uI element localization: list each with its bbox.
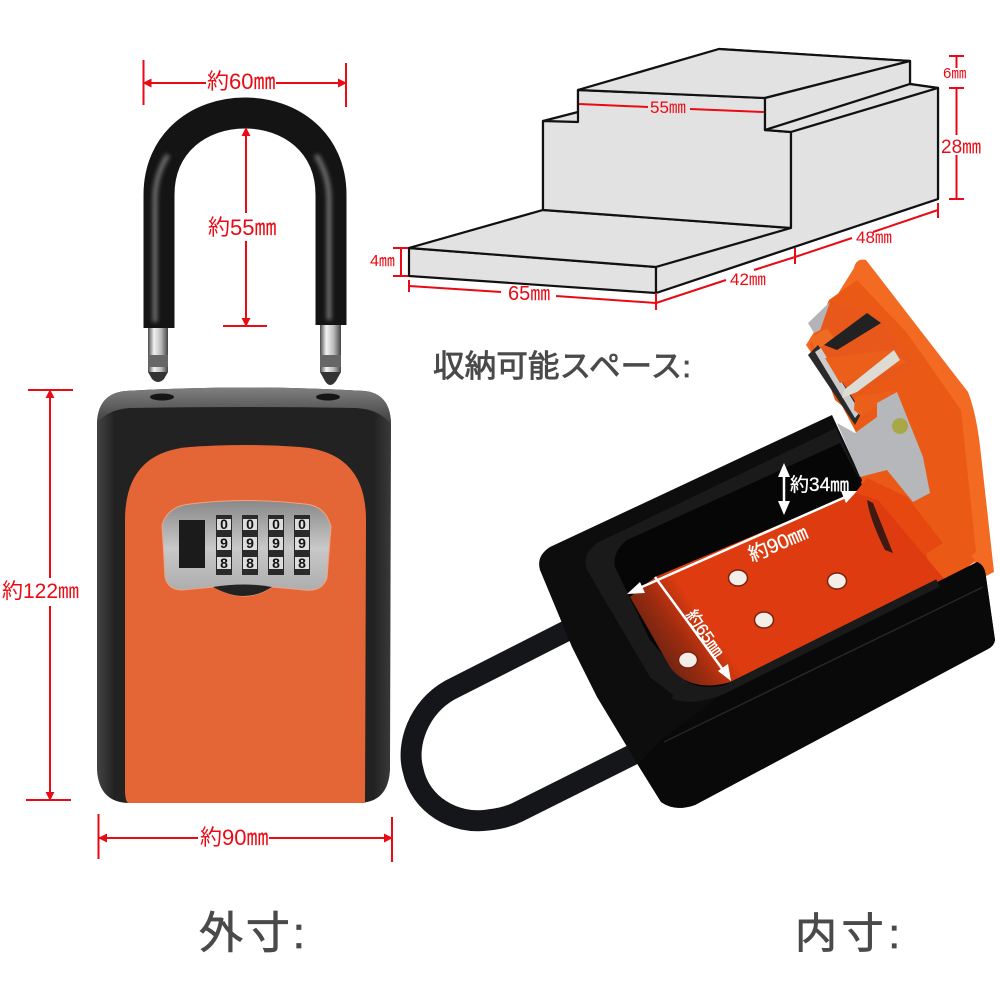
width 60 right segment (276, 82, 346, 84)
key hook slot (867, 500, 893, 553)
cavity (614, 443, 938, 687)
label: 42mm: 42㎜ (730, 270, 766, 289)
width 60 ticks (144, 60, 346, 107)
floor holes (678, 570, 846, 668)
body top face (97, 388, 391, 425)
length arrow (655, 577, 726, 674)
shackle (159, 113, 331, 328)
label: width 60: 約60㎜ (207, 69, 275, 94)
heading: outer dimensions: 外寸: (199, 909, 305, 958)
digit dials: 9 (220, 535, 228, 551)
front lip (638, 562, 995, 808)
lip front edge (664, 587, 983, 742)
latch frame rails (808, 345, 862, 425)
width ticks (98, 814, 392, 862)
digit dials (216, 515, 310, 575)
stair dimensions (393, 56, 964, 310)
label: 4mm: 4㎜ (370, 253, 395, 270)
brass screw (892, 418, 908, 434)
top gray bracket (808, 302, 845, 333)
body outer (539, 415, 995, 808)
second orange slide (825, 350, 907, 383)
heading: storage space: 収納可能スペース: (433, 349, 691, 384)
label: interior length 65: 約65㎜ (682, 606, 728, 661)
upper orange slide (810, 328, 835, 350)
interior dimensions (627, 463, 857, 681)
thumb notch (213, 584, 272, 596)
label: shackle 55: 約55㎜ (208, 215, 276, 240)
slider knob (179, 520, 205, 568)
shackle tips (148, 324, 341, 385)
width 90 right segment (269, 837, 392, 839)
rim edge below floor (673, 583, 938, 698)
digit dials: 0 (246, 516, 254, 532)
gray latch plate (837, 392, 930, 502)
open lock with shackle (411, 260, 995, 821)
stair diagram of storage space (409, 49, 938, 293)
hinge filler (850, 440, 975, 590)
label: height 122: 約122㎜ (2, 580, 79, 603)
height 122 dimension line (49, 390, 51, 578)
keypad window (162, 500, 331, 596)
label: width 90: 約90㎜ (200, 825, 268, 850)
metal rail (815, 348, 860, 418)
lock body (97, 388, 391, 803)
latch black bar (824, 313, 881, 350)
interior side wall (855, 478, 945, 600)
width arrow (635, 495, 850, 590)
digit dials: 9 (246, 535, 254, 551)
depth arrow (783, 470, 785, 508)
width 90 dimension line (99, 837, 198, 839)
shackle height lower segment (245, 241, 247, 326)
shackle base tick (223, 325, 267, 327)
lid (806, 260, 994, 580)
front lock with shackle (97, 113, 391, 803)
label: 65mm: 65㎜ (508, 283, 550, 305)
label: 55mm: 55㎜ (650, 98, 686, 117)
digit dials: 8 (298, 555, 306, 571)
label: interior width 90: 約90㎜ (745, 521, 811, 567)
digit dials: 9 (272, 535, 280, 551)
mounting holes (150, 394, 340, 400)
height 122 lower segment (49, 606, 51, 800)
interior floor (630, 493, 945, 685)
label: 48mm: 48㎜ (856, 228, 892, 247)
orange latch base (815, 302, 914, 410)
shackle height dimension line (245, 128, 247, 213)
lid inner plate (810, 280, 976, 578)
digit dials: 8 (272, 555, 280, 571)
digit dials: 0 (220, 516, 228, 532)
rim ring (585, 428, 938, 700)
digit dials: 9 (298, 535, 306, 551)
height ticks (26, 390, 73, 800)
third orange part (854, 390, 899, 417)
front lock dimensions (26, 60, 392, 862)
side shackle (411, 625, 652, 821)
label: interior depth 34: 約34㎜ (790, 474, 849, 496)
label: 6mm: 6㎜ (943, 65, 966, 82)
digit dials: 8 (220, 555, 228, 571)
digit dials: 8 (246, 555, 254, 571)
shackle highlights (155, 155, 329, 322)
width 60 left segment (144, 82, 206, 84)
orange door (125, 445, 366, 803)
digit dials: 0 (272, 516, 280, 532)
heading: inner dimensions: 内寸: (795, 910, 900, 957)
label: 28mm: 28㎜ (941, 137, 981, 158)
metal tab (842, 350, 900, 398)
digit dials: 0 (298, 516, 306, 532)
